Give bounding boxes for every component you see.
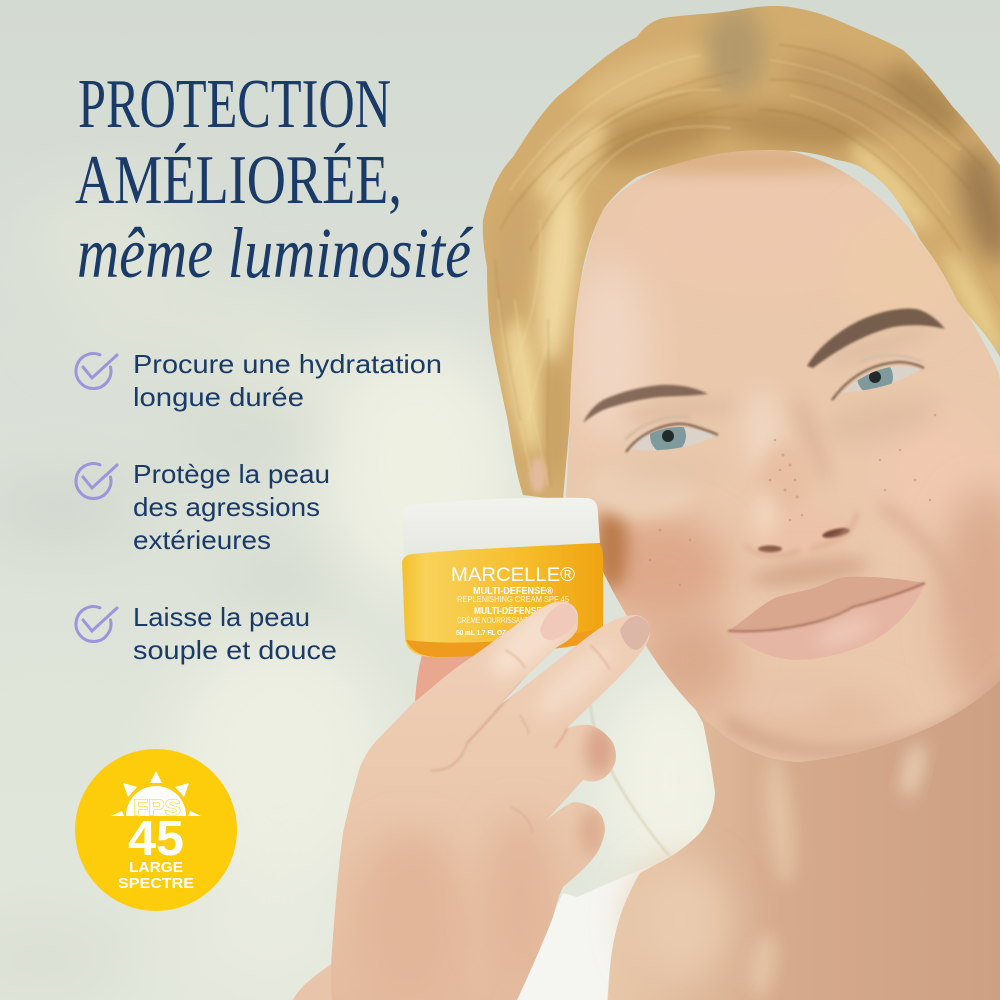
title: même luminosité — [77, 213, 473, 293]
hair — [483, 5, 1000, 500]
portrait photo of woman — [293, 5, 1000, 1000]
lips — [728, 577, 925, 660]
badge: FPS 45 large spectre: SPECTRE — [118, 875, 194, 892]
thumb behind jar — [415, 655, 480, 702]
jar label — [451, 565, 575, 637]
badge: FPS 45 large spectre: FPS — [133, 795, 181, 820]
benefit 3 — [76, 602, 337, 665]
jar label: MULTI-DÉFENSE — [474, 604, 542, 617]
right eyebrow — [807, 308, 945, 368]
icon: sun — [111, 771, 201, 816]
freckles — [649, 414, 936, 586]
face — [560, 146, 1000, 762]
index fingernail — [540, 604, 577, 640]
text: souple et douce — [133, 635, 337, 665]
jar label: 50 mL 1.7 FL OZ — [456, 630, 507, 637]
left eye — [625, 417, 718, 454]
stray hair strand — [590, 700, 670, 857]
nose — [745, 491, 871, 592]
neck and chest — [608, 660, 1000, 1000]
forearm behind hand — [293, 958, 345, 1000]
hand holding jar — [331, 592, 650, 1000]
text: Laisse la peau — [133, 602, 310, 632]
product jar: Marcelle Multi-Défense — [402, 498, 603, 702]
text: Protège la peau — [133, 459, 330, 489]
title: AMÉLIORÉE, — [75, 142, 402, 219]
benefit 2 — [76, 459, 330, 555]
icon: check circle — [76, 464, 117, 499]
jar label: MARCELLE® — [451, 565, 575, 586]
jar label: MULTI-DEFENSE® — [473, 586, 554, 597]
text: longue durée — [133, 382, 304, 412]
benefit 1 — [76, 349, 442, 412]
finger shading — [586, 724, 614, 776]
badge: FPS 45 large spectre — [75, 749, 237, 911]
right eye — [832, 355, 924, 400]
jar label: CRÈME NOURRISSANTE — [457, 615, 533, 625]
jar body — [402, 543, 603, 657]
icon: check circle — [76, 607, 117, 642]
badge: FPS 45 large spectre: LARGE — [129, 859, 183, 876]
jar lid — [402, 498, 600, 555]
title: PROTECTION — [78, 66, 391, 143]
white tank top strap — [517, 865, 652, 1000]
text — [133, 602, 337, 665]
middle fingernail — [620, 616, 650, 650]
ear — [530, 457, 546, 493]
badge: FPS 45 large spectre: 45 — [128, 812, 184, 866]
jar label: REPLENISHING CREAM SPF 45 — [457, 594, 569, 604]
text: extérieures — [133, 525, 271, 555]
text: des agressions — [133, 492, 320, 522]
left eyebrow — [583, 385, 708, 423]
text — [133, 459, 330, 555]
text: Procure une hydratation — [133, 349, 442, 379]
text — [133, 349, 442, 412]
icon: check circle — [76, 354, 117, 389]
title — [75, 66, 473, 293]
